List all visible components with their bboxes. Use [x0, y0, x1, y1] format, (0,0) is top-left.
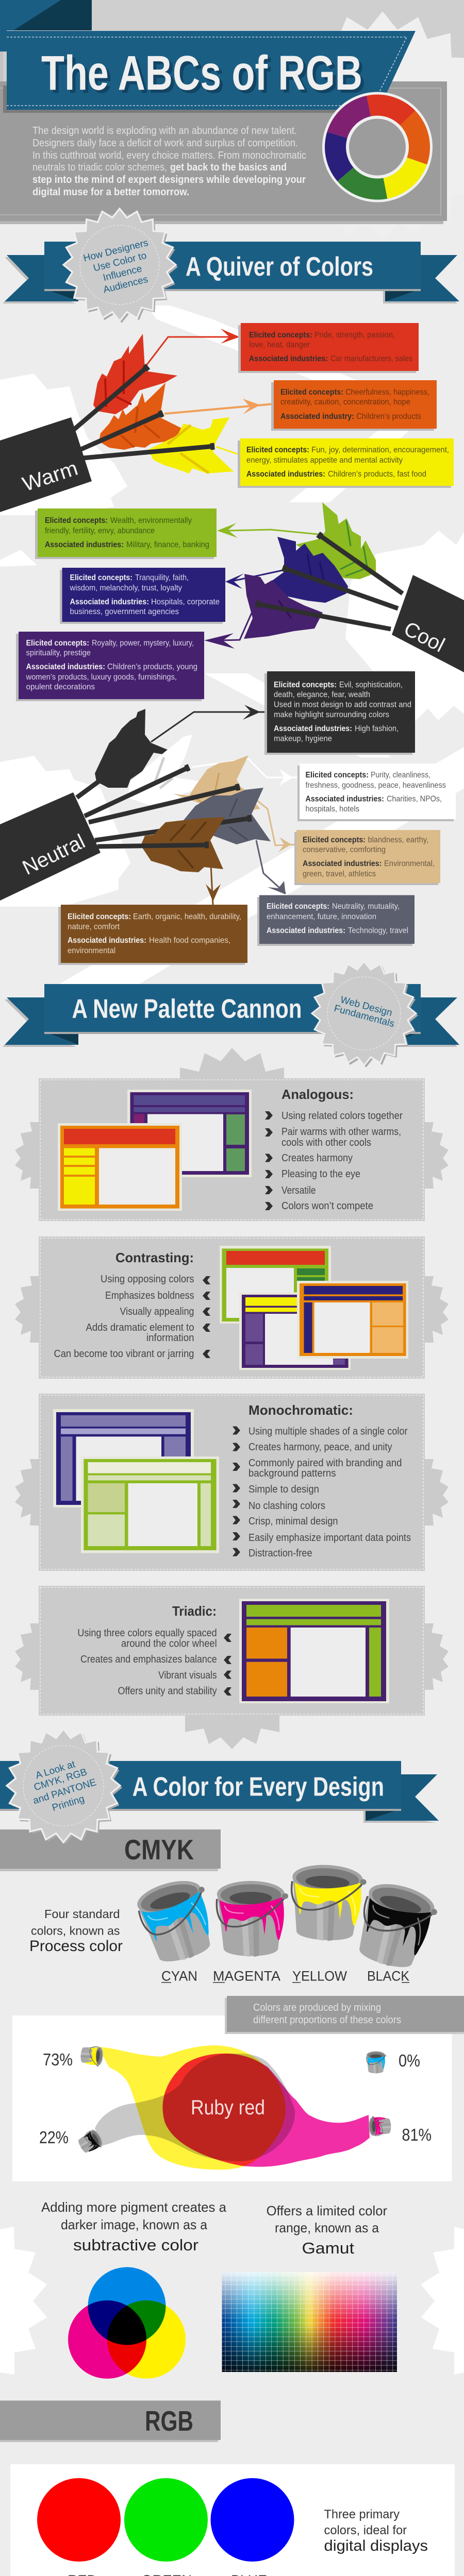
panel: brown concepts: environmental — [68, 946, 115, 955]
intro text: The design world is exploding with an abundance of new talent. — [32, 125, 297, 137]
panel: black concepts: Evil, sophistication, — [339, 681, 403, 689]
list: Analogous traits: Pair warms with other warms, — [281, 1126, 401, 1138]
list: Monochromatic traits: Using multiple shades of a single color — [248, 1426, 408, 1437]
quiver: warm — [0, 417, 92, 512]
panel: orange concepts: Associated industry: — [280, 412, 354, 421]
panel: brown concepts: Elicited concepts: — [68, 912, 131, 921]
panel: Contrasting — [15, 1236, 449, 1379]
heading: A New Palette Cannon — [72, 994, 302, 1024]
panel: yellow concepts: energy, stimulates appetite and mental activity — [246, 456, 403, 465]
panel: indigo concepts: Tranquility, faith, — [135, 573, 189, 582]
panel: black concepts — [264, 671, 415, 755]
arrow: slate feather — [95, 788, 271, 844]
percentages — [39, 2050, 432, 2147]
arrow: yellow feather — [83, 417, 234, 473]
chart: CMY venn — [68, 2267, 186, 2379]
panel: orange concepts: Children’s products — [356, 412, 421, 421]
heading: Monochromatic: Monochromatic: — [248, 1402, 353, 1418]
badge: How Designers Use Color: Use Color to — [92, 250, 147, 274]
panel: indigo concepts: business, government agencies — [70, 607, 179, 616]
list: Monochromatic traits: background patterns — [248, 1468, 336, 1479]
panel: tan concepts: Environmental, — [384, 859, 435, 868]
arrow: red feather — [74, 334, 177, 430]
pointer arrow: slate — [256, 840, 286, 894]
band: CMYK — [0, 1829, 221, 1871]
cool arrows group — [204, 502, 464, 672]
percentages: 81% — [402, 2125, 432, 2144]
panel: brown concepts — [58, 905, 247, 965]
panel: tan concepts: Associated industries: — [303, 859, 382, 868]
arrow: white feather — [85, 735, 216, 816]
list: Contrasting traits: Adds dramatic element to — [86, 1322, 194, 1333]
panel: white concepts: Charities, NPOs, — [387, 794, 442, 804]
text: Four standard colors — [29, 1907, 123, 1955]
text: Four standard colors: colors, known as — [31, 1924, 120, 1938]
pointer arrow: green — [217, 523, 318, 538]
panel: Analogous — [15, 1048, 449, 1221]
panel: brown concepts: Earth, organic, health, durability, — [133, 912, 241, 921]
warm arrows group — [0, 329, 274, 512]
quiver: neutral: Neutral — [19, 830, 89, 879]
pointer arrow: brown — [206, 865, 221, 905]
quiver: cool: Cool — [400, 617, 449, 657]
panel: tan concepts: Elicited concepts: — [303, 836, 366, 844]
panel: slate concepts: Elicited concepts: — [267, 902, 329, 911]
panel: black concepts: High fashion, — [355, 724, 399, 733]
text: Gamut — [267, 2203, 387, 2257]
text: Three primary colors: colors, ideal for — [324, 2523, 407, 2537]
panel: green concepts — [35, 509, 217, 559]
panel: orange concepts: Elicited concepts: — [280, 388, 343, 397]
heading: A Color for Every Design — [132, 1772, 384, 1802]
intro text: get back to the basics and — [170, 162, 287, 173]
panel: slate concepts: Associated industries: — [267, 926, 345, 935]
panel: black concepts: Associated industries: — [274, 724, 352, 733]
badge: A Look at CMYK, RGB and PANTONE Printing: and PANTONE — [32, 1777, 97, 1806]
text: subtractive color: Adding more pigment creates a — [41, 2199, 227, 2215]
pointer arrow: white — [192, 759, 299, 786]
band: RGB: RGB — [145, 2405, 193, 2437]
badge: How Designers Use Color: How Designers — [82, 238, 150, 264]
badge: Web Design Fundamentals — [312, 961, 418, 1067]
panel: brown concepts: nature, comfort — [68, 922, 120, 931]
panel: green concepts: Wealth, environmentally — [110, 516, 192, 525]
panel: slate concepts: Neutrality, mutuality, — [332, 902, 400, 911]
badge: A Look at CMYK, RGB and PANTONE Printing: Printing — [51, 1793, 86, 1814]
list: Triadic traits: Using three colors equally spaced — [77, 1628, 217, 1639]
labels: CMYK names: YELLOW — [292, 1968, 347, 1984]
pointer arrow: indigo — [225, 570, 283, 589]
pointer arrow: purple — [204, 604, 256, 649]
heading: Analogous: Analogous: — [281, 1087, 354, 1102]
panel: black concepts: makeup, hygiene — [274, 735, 332, 743]
list: Monochromatic traits: Commonly paired with branding and — [248, 1458, 402, 1469]
panel: black concepts: Used in most design to add contrast and — [274, 701, 411, 709]
text: subtractive color: darker image, known as a — [61, 2217, 208, 2232]
panel: brown concepts: Health food companies, — [149, 936, 230, 945]
panel: tan concepts — [294, 830, 440, 885]
arrow: black feather — [77, 709, 169, 798]
text: Four standard colors: Process color — [29, 1938, 123, 1955]
band: CMYK: CMYK — [124, 1834, 194, 1866]
intro text: Designers daily face a deficit of work and surplus of competition. — [32, 138, 298, 149]
panel: green concepts: Military, finance, banking — [126, 540, 209, 549]
header section — [0, 0, 464, 241]
list: Triadic traits — [77, 1628, 231, 1697]
list: Analogous traits: Using related colors together — [281, 1110, 403, 1122]
percentages: 22% — [39, 2128, 69, 2147]
heading: A Quiver of Colors — [186, 252, 373, 282]
list: Analogous traits: Versatile — [281, 1185, 316, 1196]
list: Contrasting traits: Can become too vibrant or jarring — [54, 1348, 194, 1360]
mockup: orange window — [297, 1281, 408, 1359]
list: Monochromatic traits: Simple to design — [248, 1484, 319, 1495]
mockup: green window — [81, 1456, 219, 1553]
panel: white concepts: Purity, cleanliness, — [371, 771, 430, 779]
list: Triadic traits: Offers unity and stability — [118, 1686, 217, 1697]
panel: white concepts: Elicited concepts: — [305, 771, 369, 779]
text: Gamut: range, known as a — [275, 2220, 379, 2235]
badge: How Designers Use Color — [63, 209, 178, 323]
panel: slate concepts — [257, 895, 415, 946]
list: Contrasting traits: information — [146, 1332, 194, 1344]
labels: CMYK names: MAGENTA — [213, 1968, 280, 1984]
text: Three primary colors — [324, 2507, 428, 2554]
panel: black concepts: death, elegance, fear, wealth — [274, 690, 370, 699]
text: Gamut: Gamut — [302, 2239, 354, 2257]
labels: CMYK names — [161, 1968, 409, 1984]
panel: yellow concepts — [238, 438, 454, 488]
panel: yellow concepts: Children’s products, fast food — [328, 470, 426, 479]
mockup: orange window — [58, 1123, 182, 1211]
panel: white concepts: Associated industries: — [305, 794, 384, 804]
panel: red concepts: Pride, strength, passion, — [314, 331, 395, 340]
panel: indigo concepts: Associated industries: — [70, 598, 149, 606]
panel: purple concepts: opulent decorations — [26, 683, 95, 691]
badge: A Look at CMYK, RGB and PANTONE Printing: CMYK, RGB — [32, 1767, 88, 1793]
intro text: neutrals to triadic color schemes, — [32, 162, 167, 173]
panel: ruby red mixing chart — [12, 2015, 452, 2181]
panel: slate concepts: enhancement, future, innovation — [267, 912, 376, 921]
label: Ruby red: Ruby red — [191, 2096, 265, 2119]
intro text: In this cutthroat world, every choice matters. From monochromatic — [32, 150, 306, 161]
intro panel — [0, 81, 447, 224]
arrow: purple feather — [244, 574, 391, 639]
badge: A Look at CMYK, RGB and PANTONE Printing: A Look at — [34, 1759, 77, 1781]
badge: How Designers Use Color: Audiences — [102, 274, 149, 296]
badge: Web Design Fundamentals: Web Design — [339, 994, 393, 1019]
callout: colors are produced by mixing: Colors are produced by mixing — [253, 2002, 381, 2013]
callout: colors are produced by mixing — [225, 1996, 464, 2034]
panel: red concepts: love, heat, danger — [249, 341, 310, 349]
panel: purple concepts: Associated industries: — [26, 663, 105, 671]
callout: colors are produced by mixing: different proportions of these colors — [253, 2014, 401, 2026]
list: Contrasting traits: Using opposing colors — [101, 1274, 194, 1285]
panel: indigo concepts — [60, 568, 225, 624]
badge: A Look at CMYK, RGB and PANTONE Printing — [7, 1729, 122, 1844]
arrow: indigo feather — [259, 537, 398, 608]
percentages: 0% — [399, 2051, 420, 2070]
panel: orange concepts — [271, 380, 437, 431]
panel: white concepts: hospitals, hotels — [305, 805, 359, 814]
list: Analogous traits: Pleasing to the eye — [281, 1168, 360, 1180]
panel: purple concepts: Children’s products, young — [107, 663, 197, 671]
panel: white concepts: freshness, goodness, peace, heavenliness — [305, 781, 446, 790]
pointer arrow: orange — [164, 399, 274, 414]
panel: tan concepts: blandness, earthy, — [368, 836, 428, 844]
text: Four standard colors: Four standard — [44, 1907, 120, 1921]
panel: yellow concepts: Fun, joy, determination, encouragement, — [311, 446, 449, 454]
panel: Monochromatic — [15, 1394, 449, 1571]
arrow: orange feather — [80, 383, 188, 450]
panel: indigo concepts: wisdom, melancholy, trust, loyalty — [70, 584, 182, 592]
pointer arrow: red — [146, 329, 240, 365]
list: Monochromatic traits — [233, 1426, 411, 1559]
text: subtractive color: subtractive color — [73, 2236, 198, 2254]
mockup: navy window — [53, 1409, 194, 1507]
panel: black concepts: Elicited concepts: — [274, 681, 337, 689]
pointer arrow: black — [151, 705, 267, 742]
panel: purple concepts: Royalty, power, mystery, luxury, — [92, 639, 194, 648]
panel: red concepts: Car manufacturers, sales — [330, 354, 412, 363]
chart: paint mix blobs — [95, 2045, 370, 2170]
panel: red concepts — [238, 323, 419, 373]
panel: white concepts — [297, 764, 456, 821]
panel: yellow concepts: Associated industries: — [246, 470, 325, 479]
panel: red concepts: Associated industries: — [249, 354, 328, 363]
list: Triadic traits: around the color wheel — [121, 1638, 217, 1650]
panel: tan concepts: conservative, comforting — [303, 845, 386, 854]
panel: purple concepts: spirituality, prestige — [26, 649, 91, 657]
list: Contrasting traits: Emphasizes boldness — [105, 1290, 194, 1301]
section banner: A Color for Every Design — [0, 1761, 441, 1823]
quiver: warm: Warm — [20, 457, 80, 496]
labels: RGB names — [68, 2572, 267, 2576]
quiver: cool — [392, 575, 464, 672]
panel: orange concepts: Cheerfulness, happiness, — [345, 388, 429, 397]
panel: green concepts: friendly, fertility, envy, abundance — [45, 527, 155, 535]
list: Contrasting traits: Visually appealing — [120, 1306, 194, 1317]
list: Analogous traits: Creates harmony — [281, 1153, 353, 1164]
icons: CMYK paint cans — [134, 1863, 441, 1975]
panel: indigo concepts: Elicited concepts: — [70, 573, 132, 582]
heading: Contrasting: Contrasting: — [115, 1250, 194, 1265]
panel: RGB primaries — [10, 2464, 455, 2576]
panel: orange concepts: creativity, caution, concentration, hope — [280, 398, 410, 406]
section banner: A New Palette Cannon — [3, 961, 459, 1067]
panel: purple concepts: women’s products, luxury goods, furnishings, — [26, 673, 177, 682]
panel: brown concepts: Associated industries: — [68, 936, 146, 945]
quiver: neutral — [0, 792, 101, 901]
list: Monochromatic traits: Distraction-free — [248, 1548, 312, 1559]
arrow: green feather — [296, 502, 403, 594]
title: The ABCs of RGB — [41, 46, 362, 100]
panel: green concepts: Associated industries: — [45, 540, 124, 549]
mockup: triadic window — [239, 1599, 389, 1703]
mockup: green window — [220, 1246, 331, 1324]
arrow: brown feather — [97, 817, 225, 872]
pointer arrow: tan — [240, 787, 296, 852]
list: Monochromatic traits: No clashing colors — [248, 1500, 325, 1512]
panel: black concepts: make highlight surrounding colors — [274, 710, 389, 719]
chart: RGB circles — [37, 2478, 294, 2562]
list: Analogous traits: Colors won’t compete — [281, 1200, 373, 1212]
labels: CMYK names: CYAN — [161, 1968, 197, 1984]
percentages: 73% — [43, 2050, 73, 2069]
icon: small paint cans — [76, 2045, 391, 2156]
chart: gamut color grid — [222, 2272, 397, 2372]
list: Triadic traits: Creates and emphasizes balance — [80, 1654, 217, 1665]
panel: indigo concepts: Hospitals, corporate — [151, 598, 220, 606]
list: Analogous traits: cools with other cools — [281, 1137, 371, 1148]
panel: yellow concepts: Elicited concepts: — [246, 446, 309, 454]
intro text — [32, 125, 306, 198]
panel: Triadic — [15, 1586, 449, 1749]
section banner: A Quiver of Colors — [3, 209, 459, 323]
mockup: purple window — [127, 1090, 252, 1177]
icon: color wheel ring — [322, 92, 433, 202]
list: Monochromatic traits: Creates harmony, peace, and unity — [248, 1442, 392, 1453]
text: Three primary colors: digital displays — [324, 2537, 428, 2554]
text: Three primary colors: Three primary — [324, 2507, 400, 2521]
title ribbon — [3, 31, 416, 113]
list: Contrasting traits — [54, 1274, 210, 1360]
panel: red concepts: Elicited concepts: — [249, 331, 312, 340]
heading: Triadic: Triadic: — [172, 1603, 217, 1619]
panel: green concepts: Elicited concepts: — [45, 516, 108, 525]
pointer arrow: yellow — [216, 447, 240, 455]
list: Monochromatic traits: Crisp, minimal design — [248, 1516, 338, 1527]
mockup: purple window — [239, 1292, 351, 1370]
text: subtractive color — [41, 2199, 227, 2254]
band: RGB — [0, 2401, 221, 2442]
text: Gamut: Offers a limited color — [267, 2203, 387, 2218]
panel: purple concepts — [16, 632, 204, 701]
badge: How Designers Use Color: Influence — [102, 263, 143, 283]
arrow: tan feather — [89, 755, 260, 822]
panel: slate concepts: Technology, travel — [348, 926, 408, 935]
list: Monochromatic traits: Easily emphasize important data points — [248, 1532, 411, 1544]
badge: Web Design Fundamentals: Fundamentals — [333, 1003, 395, 1029]
intro text: digital muse for a better tomorrow. — [32, 187, 189, 198]
neutral arrows group — [0, 705, 299, 905]
list: Triadic traits: Vibrant visuals — [158, 1670, 217, 1681]
panel: purple concepts: Elicited concepts: — [26, 639, 89, 648]
labels: CMYK names: BLACK — [367, 1968, 409, 1984]
title ribbon: The ABCs of RGB — [44, 49, 366, 104]
intro text: step into the mind of expert designers while developing your — [32, 174, 306, 185]
list: Analogous traits — [265, 1110, 403, 1212]
panel: tan concepts: green, travel, athletics — [303, 870, 376, 878]
